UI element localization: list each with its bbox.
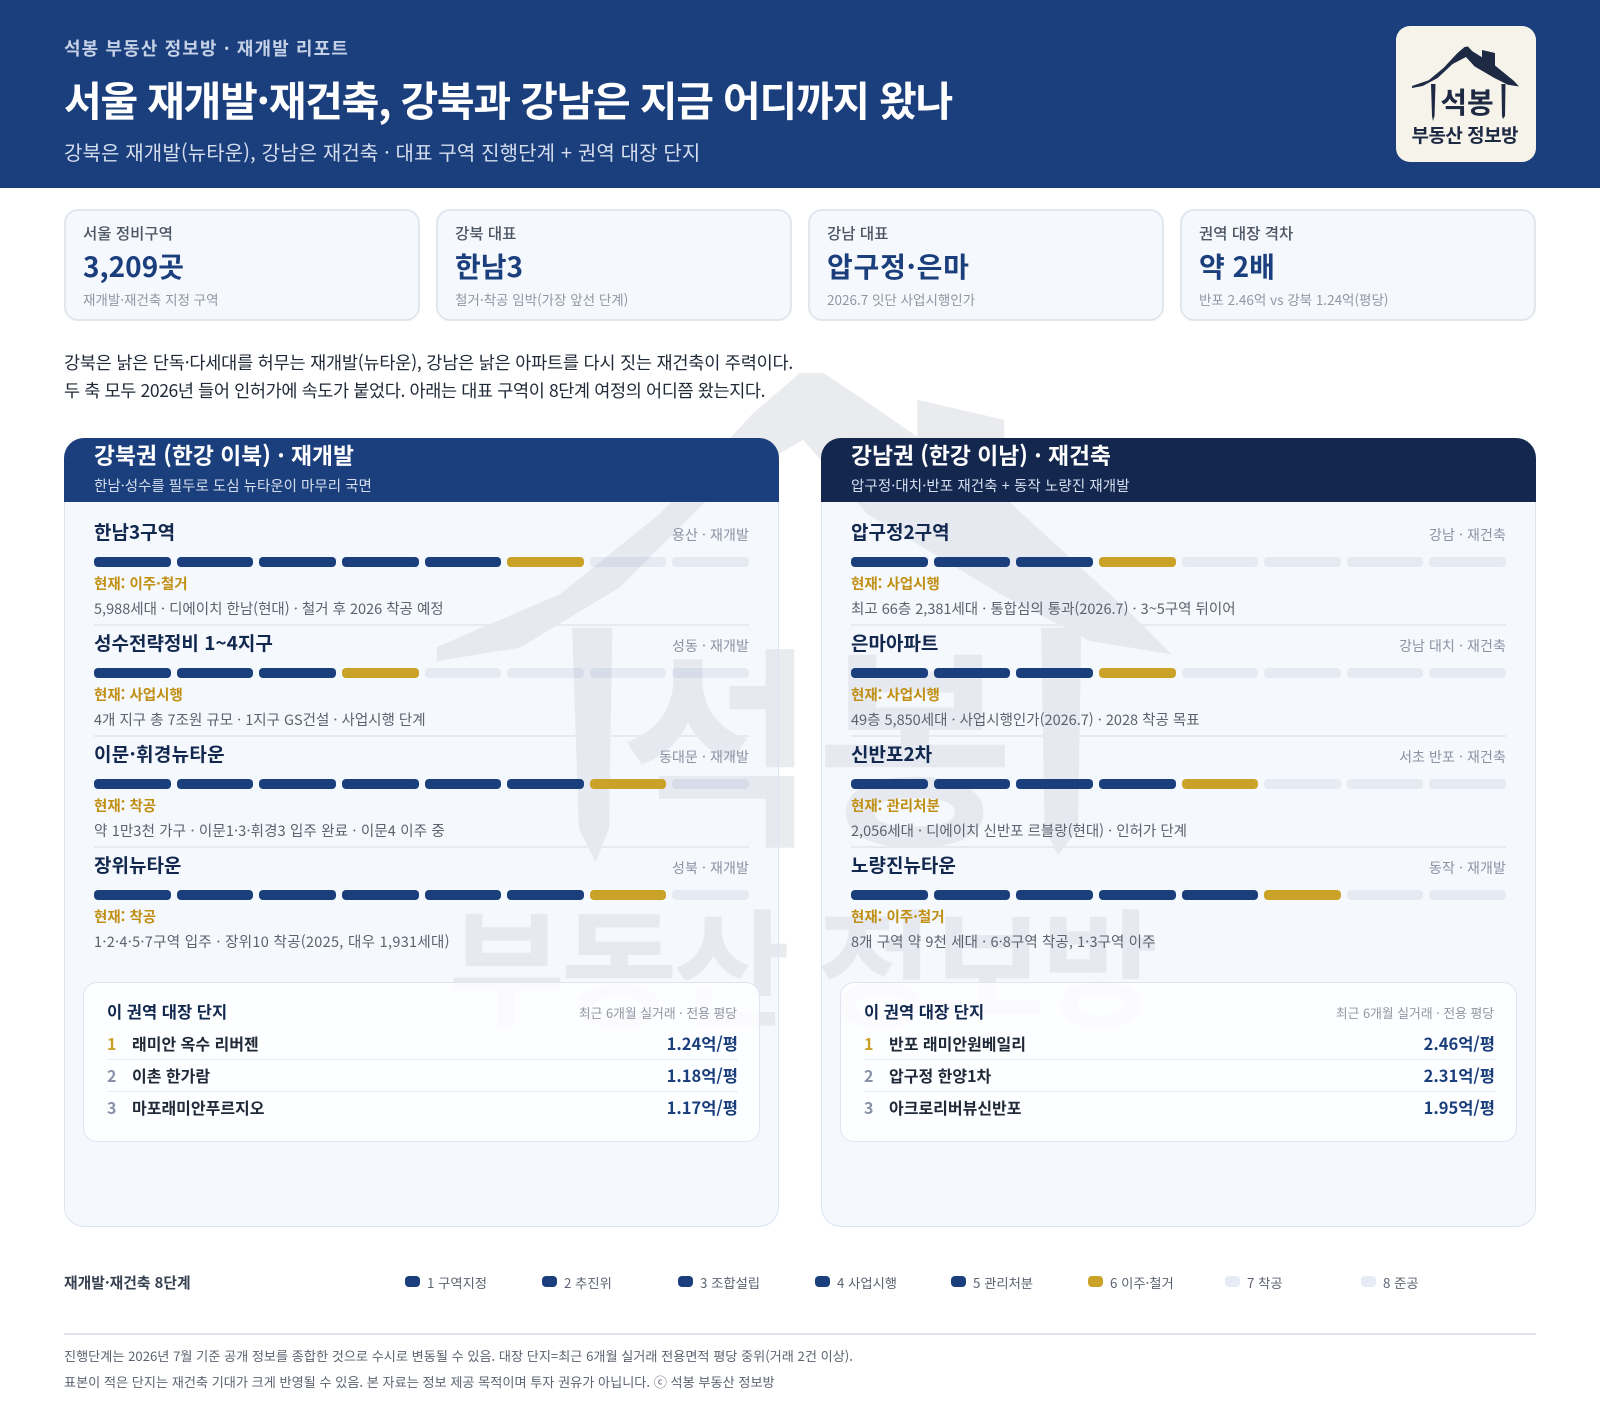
district: 장위뉴타운: 1·2·4·5·7구역 입주 · 장위10 착공(2025, 대우 1,931세대) (94, 931, 450, 952)
panel: 강북권 (64, 438, 779, 1227)
stat card: 서울 정비구역: 3,209곳 (83, 246, 184, 286)
district: 노량진뉴타운: 현재: 이주·철거 (851, 906, 945, 927)
top complexes: 강남 (840, 982, 1517, 1142)
district: 은마아파트: 49층 5,850세대 · 사업시행인가(2026.7) · 2028 착공 목표 (851, 709, 1200, 730)
stat card: 권역 대장 격차: 권역 대장 격차 (1199, 222, 1293, 244)
top complexes: 강북: 2 (107, 1063, 116, 1087)
top complexes: 강남: 아크로리버뷰신반포 (889, 1095, 1021, 1119)
district: 이문·휘경뉴타운: 약 1만3천 가구 · 이문1·3·휘경3 입주 완료 · 이문4 이주 중 (94, 820, 445, 841)
stat card: 서울 정비구역: 재개발·재건축 지정 구역 (83, 289, 219, 309)
district: 은마아파트 (851, 628, 1506, 737)
district: 압구정2구역: 압구정2구역 (851, 518, 950, 545)
district: 은마아파트: 강남 대치 · 재건축 (1399, 636, 1506, 656)
top complexes: 강북: 1.24억/평 (667, 1031, 738, 1055)
district: 신반포2차: 2,056세대 · 디에이치 신반포 르블랑(현대) · 인허가 단계 (851, 820, 1187, 841)
district: 노량진뉴타운: 노량진뉴타운 (851, 851, 956, 878)
stat card: 강남 대표: 압구정·은마 (827, 246, 970, 286)
top complexes: 강남: 3 (864, 1095, 873, 1119)
legend title: 재개발·재건축 8단계 (64, 1272, 191, 1293)
top complexes: 강북: 최근 6개월 실거래 · 전용 평당 (579, 1003, 737, 1022)
top complexes: 강남: 반포 래미안원베일리 (889, 1031, 1026, 1055)
panel header: 강북권: 한남·성수를 필두로 도심 뉴타운이 마무리 국면 (94, 475, 372, 496)
stat card: 강남 대표: 2026.7 잇단 사업시행인가 (827, 289, 975, 309)
top complexes: 강북 (83, 982, 760, 1142)
top complexes: 강남: 2.31억/평 (1424, 1063, 1495, 1087)
legend: 2 추진위 (564, 1273, 612, 1292)
title: 서울 재개발·재건축, 강북과 강남은 지금 어디까지 왔나 (64, 68, 952, 128)
subtitle: 강북은 재개발(뉴타운), 강남은 재건축 · 대표 구역 진행단계 + 권역 대장 단지 (64, 137, 700, 166)
district: 장위뉴타운: 장위뉴타운 (94, 851, 181, 878)
district: 이문·휘경뉴타운: 동대문 · 재개발 (659, 747, 749, 767)
intro paragraph (64, 350, 793, 403)
stat card: 강북 대표 (436, 209, 792, 321)
legend: 7 착공 (1247, 1273, 1283, 1292)
intro paragraph: 강북은 낡은 단독·다세대를 허무는 재개발(뉴타운), 강남은 낡은 아파트를 다시 짓는 재건축이 주력이다. (64, 350, 793, 375)
district: 성수전략정비: 성동 · 재개발 (672, 636, 749, 656)
watermark logo: 석봉 (619, 580, 1014, 891)
legend: 3 조합설립 (700, 1273, 760, 1292)
stat card: 강북 대표: 한남3 (455, 246, 523, 286)
top complexes: 강북: 이 권역 대장 단지 (107, 999, 227, 1023)
top complexes: 강남: 2.46억/평 (1424, 1031, 1495, 1055)
district: 한남3구역: 용산 · 재개발 (672, 525, 749, 545)
district: 한남3구역: 한남3구역 (94, 518, 175, 545)
panel header: 강남권 (821, 438, 1536, 502)
panel header: 강남권: 압구정·대치·반포 재건축 + 동작 노량진 재개발 (851, 475, 1130, 496)
legend: 8 준공 (1383, 1273, 1419, 1292)
district: 장위뉴타운 (94, 851, 749, 952)
legend: 6 이주·철거 (1110, 1273, 1174, 1292)
panel header: 강북권 (64, 438, 779, 502)
legend: 4 사업시행 (837, 1273, 897, 1292)
stat card: 서울 정비구역 (64, 209, 420, 321)
district: 노량진뉴타운: 동작 · 재개발 (1429, 858, 1506, 878)
header band (0, 0, 1600, 188)
district: 은마아파트: 현재: 사업시행 (851, 684, 940, 705)
legend: 1 구역지정 (427, 1273, 487, 1292)
stat card: 강남 대표 (808, 209, 1164, 321)
panel: 강남권 (821, 438, 1536, 1227)
top complexes: 강남: 이 권역 대장 단지 (864, 999, 984, 1023)
stat card: 강북 대표: 철거·착공 임박(가장 앞선 단계) (455, 289, 628, 309)
district: 성수전략정비 (94, 628, 749, 737)
district: 성수전략정비: 4개 지구 총 7조원 규모 · 1지구 GS건설 · 사업시행 단계 (94, 709, 426, 730)
district: 압구정2구역: 최고 66층 2,381세대 · 통합심의 통과(2026.7) · 3~5구역 뒤이어 (851, 598, 1236, 619)
district: 노량진뉴타운: 8개 구역 약 9천 세대 · 6·8구역 착공, 1·3구역 이주 (851, 931, 1156, 952)
district: 은마아파트: 은마아파트 (851, 629, 938, 656)
kicker: 석봉 부동산 정보방 · 재개발 리포트 (64, 35, 349, 61)
top complexes: 강북: 1.18억/평 (667, 1063, 738, 1087)
legend (64, 1272, 1419, 1293)
top complexes: 강남: 1 (864, 1031, 873, 1055)
logo badge (1396, 26, 1536, 162)
district: 한남3구역: 현재: 이주·철거 (94, 573, 188, 594)
footnote (64, 1346, 853, 1390)
district: 이문·휘경뉴타운: 이문·휘경뉴타운 (94, 740, 225, 767)
top complexes: 강북: 래미안 옥수 리버젠 (132, 1031, 259, 1055)
district: 압구정2구역 (851, 517, 1506, 626)
district: 이문·휘경뉴타운 (94, 739, 749, 848)
stat card: 권역 대장 격차: 약 2배 (1199, 246, 1275, 286)
top complexes: 강북: 1.17억/평 (667, 1095, 738, 1119)
stat card: 강남 대표: 강남 대표 (827, 222, 888, 244)
footnote: 진행단계는 2026년 7월 기준 공개 정보를 종합한 것으로 수시로 변동될 수 있음. 대장 단지=최근 6개월 실거래 전용면적 평당 중위(거래 2건 이상). (64, 1346, 853, 1365)
district: 신반포2차 (851, 739, 1506, 848)
stat card: 권역 대장 격차 (1180, 209, 1536, 321)
district: 장위뉴타운: 성북 · 재개발 (672, 858, 749, 878)
district: 성수전략정비: 성수전략정비 1~4지구 (94, 629, 273, 656)
district: 신반포2차: 현재: 관리처분 (851, 795, 940, 816)
watermark logo: 부동산 정보방 (448, 868, 1158, 1053)
district: 노량진뉴타운 (851, 851, 1506, 952)
district: 신반포2차: 서초 반포 · 재건축 (1399, 747, 1506, 767)
district: 한남3구역 (94, 517, 749, 626)
top complexes: 강북: 1 (107, 1031, 116, 1055)
district: 성수전략정비: 현재: 사업시행 (94, 684, 183, 705)
top complexes: 강남: 최근 6개월 실거래 · 전용 평당 (1336, 1003, 1494, 1022)
intro paragraph: 두 축 모두 2026년 들어 인허가에 속도가 붙었다. 아래는 대표 구역이 8단계 여정의 어디쯤 왔는지다. (64, 378, 765, 403)
panel header: 강남권: 강남권 (한강 이남) · 재건축 (851, 438, 1111, 471)
footnote: 표본이 적은 단지는 재건축 기대가 크게 반영될 수 있음. 본 자료는 정보 제공 목적이며 투자 권유가 아닙니다. ⓒ 석봉 부동산 정보방 (64, 1372, 775, 1390)
logo badge: 부동산 정보방 (1412, 121, 1518, 148)
stat card: 강북 대표: 강북 대표 (455, 222, 516, 244)
district: 한남3구역: 5,988세대 · 디에이치 한남(현대) · 철거 후 2026 착공 예정 (94, 598, 444, 619)
district: 압구정2구역: 강남 · 재건축 (1429, 525, 1506, 545)
panel header: 강북권: 강북권 (한강 이북) · 재개발 (94, 438, 354, 471)
legend: 5 관리처분 (973, 1273, 1033, 1292)
district: 이문·휘경뉴타운: 현재: 착공 (94, 795, 156, 816)
top complexes: 강북: 이촌 한가람 (132, 1063, 210, 1087)
logo badge: 석봉 (1440, 80, 1494, 122)
top complexes: 강남: 1.95억/평 (1424, 1095, 1495, 1119)
district: 장위뉴타운: 현재: 착공 (94, 906, 156, 927)
stat card: 권역 대장 격차: 반포 2.46억 vs 강북 1.24억(평당) (1199, 289, 1388, 309)
district: 압구정2구역: 현재: 사업시행 (851, 573, 940, 594)
top complexes: 강북: 3 (107, 1095, 116, 1119)
top complexes: 강남: 압구정 한양1차 (889, 1063, 991, 1087)
stat card: 서울 정비구역: 서울 정비구역 (83, 222, 173, 244)
top complexes: 강북: 마포래미안푸르지오 (132, 1095, 264, 1119)
district: 신반포2차: 신반포2차 (851, 740, 932, 767)
top complexes: 강남: 2 (864, 1063, 873, 1087)
